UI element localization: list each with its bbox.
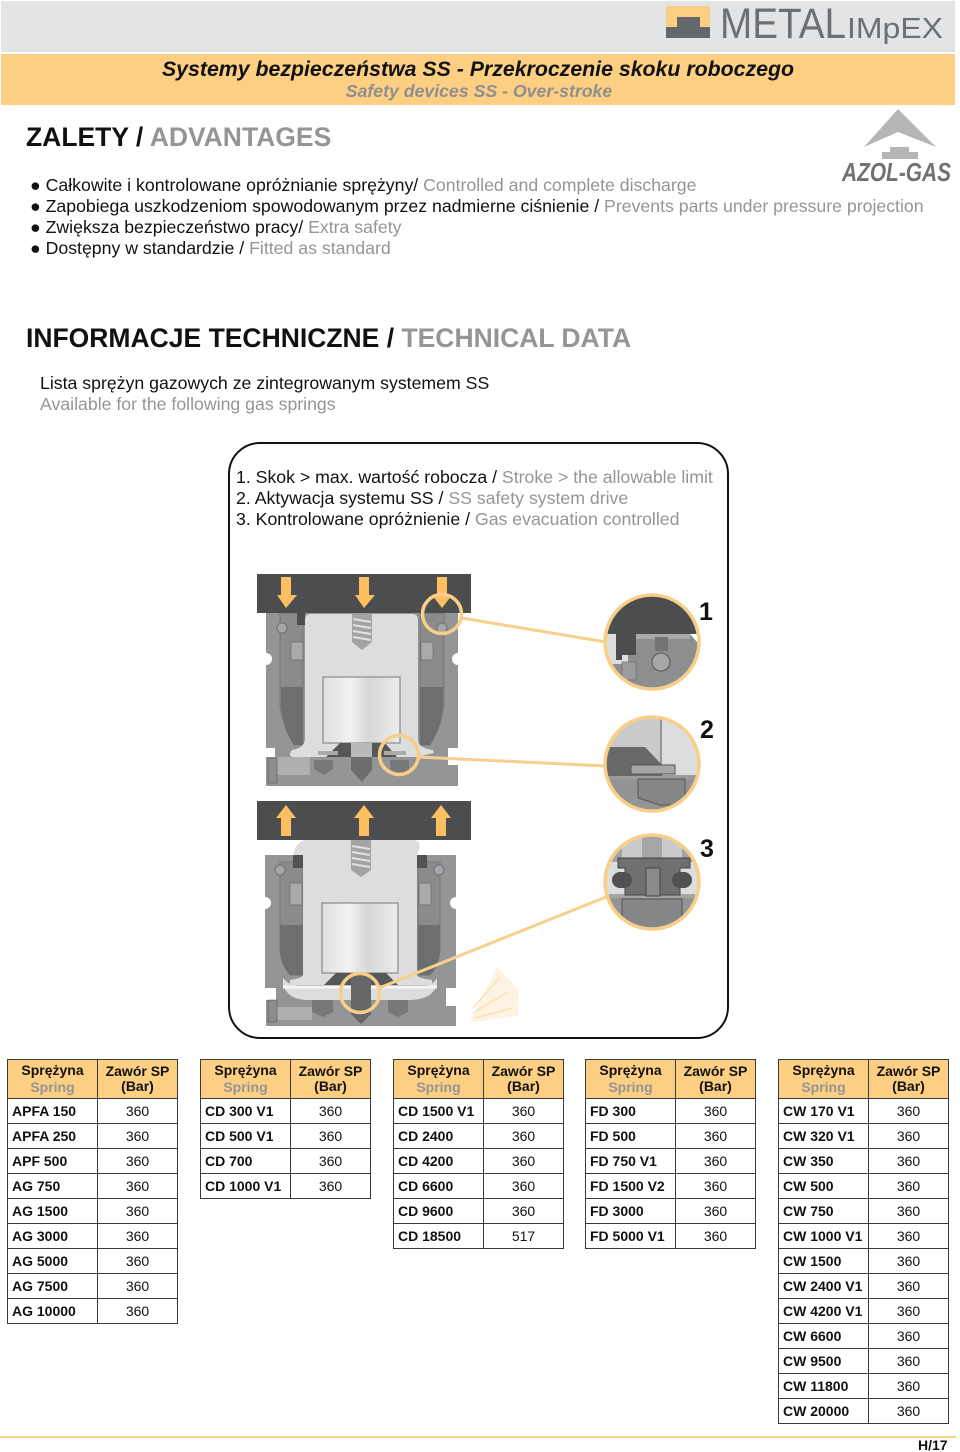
heading: technical data: INFORMACJE TECHNICZNE / TECHNICAL DATA [26, 323, 631, 353]
table: APFA / AG springs: 360 [126, 1228, 149, 1244]
table: CW springs: CW 1500 [783, 1252, 841, 1268]
table: CD large springs: CD 18500 [398, 1228, 461, 1244]
table: APFA / AG springs: Sprężyna [21, 1062, 84, 1078]
table: CW springs: 360 [897, 1378, 920, 1394]
table: CD small springs: 360 [319, 1178, 342, 1194]
detail numbers: 2 [700, 716, 714, 744]
logo: METAL impex: IMpEX [847, 13, 943, 45]
table: CD small springs: Sprężyna [214, 1062, 277, 1078]
intro text: Lista sprężyn gazowych ze zintegrowanym systemem SS [40, 373, 489, 393]
table: FD springs: FD 5000 V1 [590, 1228, 665, 1244]
table: CD large springs: CD 1500 V1 [398, 1102, 474, 1118]
table: CW springs: Zawór SP [877, 1063, 940, 1079]
table: CD large springs: CD 2400 [398, 1128, 453, 1144]
advantages list: ● Zwiększa bezpieczeństwo pracy/ Extra safety [30, 217, 401, 237]
table: CD small springs: 360 [319, 1102, 342, 1118]
logo: METAL impex [666, 1, 943, 48]
table: CD small springs [200, 1059, 371, 1199]
header bar with logo [1, 1, 955, 52]
table: FD springs: FD 300 [590, 1102, 636, 1118]
table: CD small springs: Spring [223, 1078, 268, 1094]
detail numbers: 3 [700, 835, 714, 863]
table: CW springs: CW 4200 V1 [783, 1302, 862, 1318]
panel: diagram [228, 442, 729, 1039]
table: APFA / AG springs: 360 [126, 1202, 149, 1218]
table: CD large springs: 360 [512, 1178, 535, 1194]
table: CW springs: CW 2400 V1 [783, 1278, 862, 1294]
table: APFA / AG springs: APFA 250 [12, 1128, 76, 1144]
table: CD small springs: Zawór SP [299, 1063, 362, 1079]
cross-section: over-stroke spring [257, 801, 471, 1026]
table: CD small springs: 360 [319, 1152, 342, 1168]
table: FD springs: Zawór SP [684, 1063, 747, 1079]
table: CW springs: 360 [897, 1352, 920, 1368]
table: CW springs: CW 1000 V1 [783, 1228, 862, 1244]
table: CW springs: 360 [897, 1202, 920, 1218]
advantages list: ● Zapobiega uszkodzeniom spowodowanym przez nadmierne ciśnienie / Prevents parts under pressure projection [30, 196, 924, 216]
table: CD large springs: 360 [512, 1128, 535, 1144]
detail circle 1 [603, 593, 701, 691]
intro text: Available for the following gas springs [40, 394, 336, 414]
table: FD springs: FD 750 V1 [590, 1152, 657, 1168]
table: CD large springs: 360 [512, 1152, 535, 1168]
table: CD small springs: (Bar) [314, 1078, 347, 1094]
table: FD springs: 360 [704, 1178, 727, 1194]
table: APFA / AG springs: AG 10000 [12, 1302, 76, 1318]
table: CD large springs [393, 1059, 564, 1249]
table: CW springs: CW 350 [783, 1152, 834, 1168]
advantages list: ● Dostępny w standardzie / Fitted as standard [30, 238, 391, 258]
table: CW springs: CW 9500 [783, 1352, 841, 1368]
table: CW springs: CW 170 V1 [783, 1102, 855, 1118]
table: CD large springs: 360 [512, 1102, 535, 1118]
table: APFA / AG springs: AG 5000 [12, 1252, 68, 1268]
table: APFA / AG springs: APFA 150 [12, 1102, 76, 1118]
table: CD small springs: 360 [319, 1128, 342, 1144]
table: CD large springs: 360 [512, 1202, 535, 1218]
table: CD small springs: CD 300 V1 [205, 1102, 273, 1118]
table: FD springs: Spring [608, 1078, 653, 1094]
table: CW springs: 360 [897, 1402, 920, 1418]
callout marker circles [340, 594, 462, 1012]
table: CW springs: 360 [897, 1252, 920, 1268]
table: CD large springs: CD 6600 [398, 1178, 453, 1194]
table: APFA / AG springs: (Bar) [121, 1078, 154, 1094]
cross-section: compressed spring [257, 574, 471, 786]
table: CW springs: CW 320 V1 [783, 1128, 855, 1144]
table: APFA / AG springs: 360 [126, 1102, 149, 1118]
chart: spring cross-sections [257, 574, 713, 1026]
table: FD springs: 360 [704, 1128, 727, 1144]
table: APFA / AG springs: AG 7500 [12, 1278, 68, 1294]
detail numbers: 1 [699, 598, 713, 626]
detail numbers [699, 598, 714, 863]
table: FD springs: FD 1500 V2 [590, 1178, 665, 1194]
table: FD springs: FD 3000 [590, 1202, 644, 1218]
numbered notes: 1. Skok > max. wartość robocza / Stroke > the allowable limit [236, 467, 713, 487]
table: CW springs: CW 20000 [783, 1402, 849, 1418]
table: CW springs: 360 [897, 1178, 920, 1194]
table: CW springs: 360 [897, 1278, 920, 1294]
table: FD springs: 360 [704, 1228, 727, 1244]
table: CW springs: 360 [897, 1152, 920, 1168]
table: APFA / AG springs [7, 1059, 178, 1324]
table: FD springs: FD 500 [590, 1128, 636, 1144]
title Polish: Systemy bezpieczeństwa SS - Przekroczenie skoku roboczego [162, 57, 794, 81]
numbered notes: 3. Kontrolowane opróżnienie / Gas evacuation controlled [236, 509, 679, 529]
table: FD springs: 360 [704, 1152, 727, 1168]
heading: advantages: ZALETY / ADVANTAGES [26, 122, 331, 152]
table: CD small springs: CD 500 V1 [205, 1128, 273, 1144]
table: FD springs [585, 1059, 756, 1249]
intro text [40, 373, 489, 414]
table: CW springs: CW 11800 [783, 1378, 848, 1394]
table: CD large springs: (Bar) [507, 1078, 540, 1094]
table: APFA / AG springs: AG 750 [12, 1178, 60, 1194]
detail circle 2 [603, 715, 701, 813]
table: CW springs: (Bar) [892, 1078, 925, 1094]
table: CD large springs: 517 [512, 1228, 535, 1244]
callout lines [379, 618, 606, 988]
advantages list [30, 175, 924, 258]
advantages list: ● Całkowite i kontrolowane opróżnianie sprężyny/ Controlled and complete discharge [30, 175, 696, 195]
table: APFA / AG springs: 360 [126, 1278, 149, 1294]
title English: Safety devices SS - Over-stroke [346, 81, 612, 101]
table: APFA / AG springs: 360 [126, 1252, 149, 1268]
table: APFA / AG springs: 360 [126, 1302, 149, 1318]
table: FD springs: (Bar) [699, 1078, 732, 1094]
logo: METAL impex: METAL [720, 1, 846, 48]
table: CD large springs: Spring [416, 1078, 461, 1094]
table: APFA / AG springs: 360 [126, 1178, 149, 1194]
table: CW springs: 360 [897, 1228, 920, 1244]
table: CD large springs: CD 9600 [398, 1202, 453, 1218]
table: APFA / AG springs: Spring [30, 1078, 75, 1094]
table: FD springs: Sprężyna [599, 1062, 662, 1078]
table: CD large springs: CD 4200 [398, 1152, 453, 1168]
logo: AZOL-GAS [841, 109, 952, 184]
icon: gas discharge burst [470, 967, 519, 1022]
table: APFA / AG springs: 360 [126, 1152, 149, 1168]
table: CD small springs: CD 1000 V1 [205, 1178, 281, 1194]
table: CD large springs: Sprężyna [407, 1062, 470, 1078]
title banner [1, 54, 955, 105]
table: APFA / AG springs: AG 1500 [12, 1202, 68, 1218]
table: CD small springs: CD 700 [205, 1152, 252, 1168]
numbered notes: 2. Aktywacja systemu SS / SS safety system drive [236, 488, 628, 508]
table: CW springs: 360 [897, 1128, 920, 1144]
table: CW springs: 360 [897, 1102, 920, 1118]
table: CW springs [778, 1059, 949, 1424]
table: CW springs: 360 [897, 1302, 920, 1318]
table: CW springs: CW 500 [783, 1178, 834, 1194]
table: FD springs: 360 [704, 1202, 727, 1218]
table: FD springs: 360 [704, 1102, 727, 1118]
numbered notes [236, 467, 713, 529]
table: CW springs: 360 [897, 1328, 920, 1344]
table: APFA / AG springs: 360 [126, 1128, 149, 1144]
table: CD large springs: Zawór SP [492, 1063, 555, 1079]
detail circle 3 [603, 833, 701, 931]
table: CW springs: CW 6600 [783, 1328, 841, 1344]
table: APFA / AG springs: AG 3000 [12, 1228, 68, 1244]
table: CW springs: CW 750 [783, 1202, 834, 1218]
table: APFA / AG springs: APF 500 [12, 1152, 67, 1168]
table: APFA / AG springs: Zawór SP [106, 1063, 169, 1079]
table: CW springs: Sprężyna [792, 1062, 855, 1078]
table: CW springs: Spring [801, 1078, 846, 1094]
